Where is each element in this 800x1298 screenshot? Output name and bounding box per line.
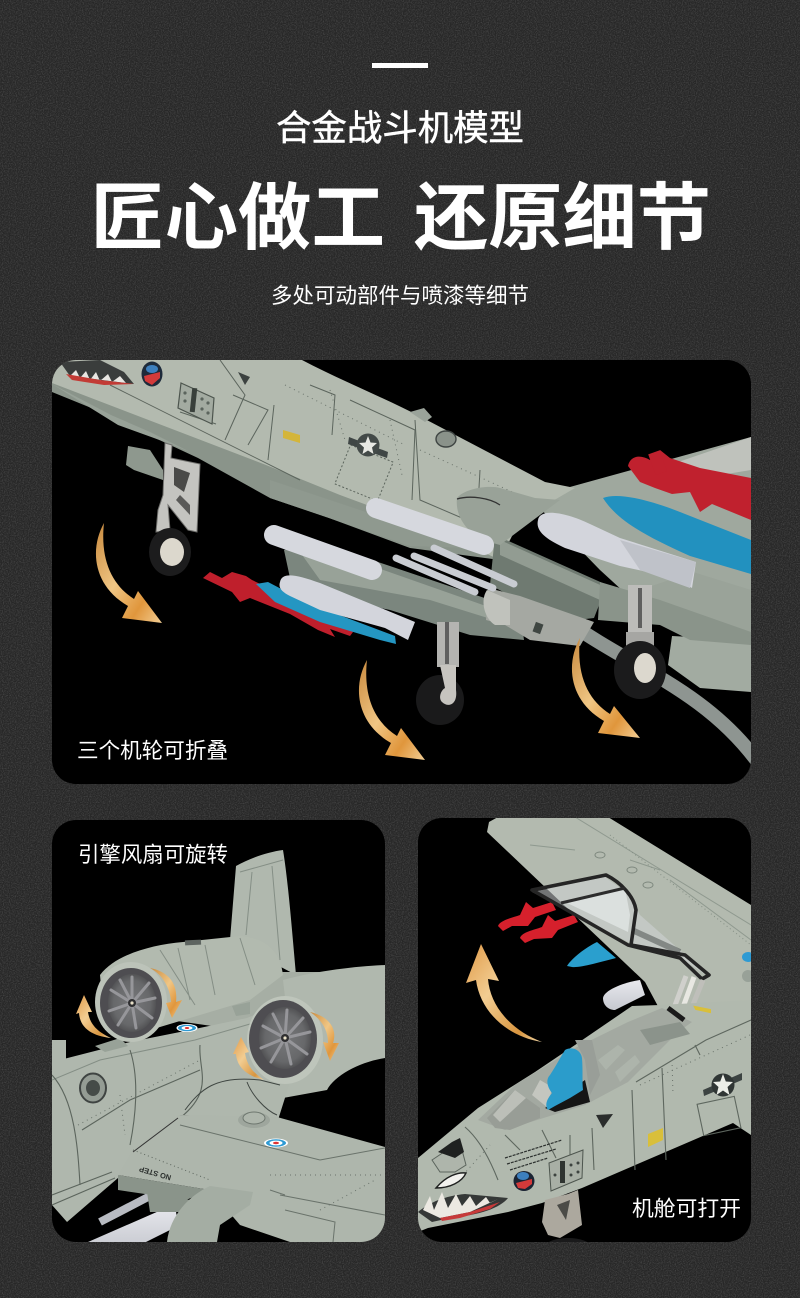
wing [118,1115,385,1242]
nose marking [432,1148,466,1172]
white missiles under wing [88,1194,190,1242]
blade antenna [410,408,432,422]
wing fairing [238,1112,270,1128]
nose gear [542,1190,590,1254]
subtitle: 合金战斗机模型 [276,108,524,148]
large white missile right [538,513,696,588]
lower white missile [279,575,415,640]
top accent bar [372,63,428,68]
nose landing gear [126,443,200,576]
star roundel [703,1073,742,1096]
right engine fan [247,996,323,1084]
yellow canopy mark [695,1007,710,1012]
yellow mark [283,430,300,443]
panel: landing gear [52,360,760,784]
yellow mark [648,1128,663,1147]
arrow: center gear fold [359,660,425,760]
canopy rail fins [598,1045,640,1082]
flag badge [142,362,162,386]
caption: cockpit: 机舱可打开 [632,1196,741,1221]
arrow: right fan down [310,1012,339,1061]
caption: engine fans: 引擎风扇可旋转 [78,842,228,867]
main title: 匠心做工 [91,178,385,259]
avionics panel [178,383,214,424]
left engine body [100,936,283,1030]
central fuselage [52,1000,300,1222]
arrow: left fan up [76,995,111,1038]
arrow: right fan up [233,1037,264,1080]
arrow: left fan down [150,968,182,1018]
curved rear stand band [583,632,760,765]
nose shark mouth [60,360,134,385]
star roundel [348,434,388,458]
canopy [532,875,709,979]
panel: cockpit [418,817,754,1254]
left blue missile [256,582,396,644]
blue missile right [603,496,751,574]
wing [530,437,751,640]
caption: landing gear: 三个机轮可折叠 [77,738,228,763]
fuselage panel lines [465,1020,751,1180]
forward cockpit coaming [487,1090,540,1130]
white missile [603,980,645,1010]
wing pylon pod [457,487,560,545]
squadron badge [436,431,456,447]
mid body between engines [178,972,320,1026]
blue pilot figure [546,1048,583,1110]
left red missiles [203,572,356,637]
main title: 还原细节 [414,178,711,259]
center landing gear [416,622,464,725]
red missiles right [628,450,751,520]
avionics panel [549,1150,583,1191]
blue missile [567,942,616,967]
shark mouth [418,1192,508,1222]
rear tail section [668,636,751,692]
chevron marking [238,372,250,385]
wing: NO STEP [138,1164,172,1182]
canopy struts [674,976,703,1012]
cockpit tub [478,1008,692,1130]
squadron badge [80,1074,106,1102]
red missiles [498,902,578,943]
panel: engine fans [52,820,385,1250]
main title [91,178,711,259]
description line: 多处可动部件与喷漆等细节 [271,284,529,308]
chevron marking [596,1114,613,1128]
arrow: nose gear fold [96,523,162,623]
right engine body [283,965,385,1098]
rear pod assemblies [284,535,751,646]
wing pod [167,1186,253,1242]
right landing gear [614,585,666,699]
fuselage [52,360,575,560]
white missile group [274,508,514,592]
pilot text decals [505,1140,562,1170]
ejection seat [532,1040,600,1108]
arrow: right gear fold [572,638,640,738]
tail fin [230,850,296,975]
left engine fan [95,962,167,1042]
anti-glare panel [438,1138,464,1158]
fuselage panel lines [110,360,490,530]
roundels [176,1024,288,1148]
fuselage [418,1000,751,1232]
wing [487,817,754,1010]
flag badge [514,1171,534,1191]
arrow: canopy opening [466,944,542,1042]
shark eye [436,1173,466,1188]
